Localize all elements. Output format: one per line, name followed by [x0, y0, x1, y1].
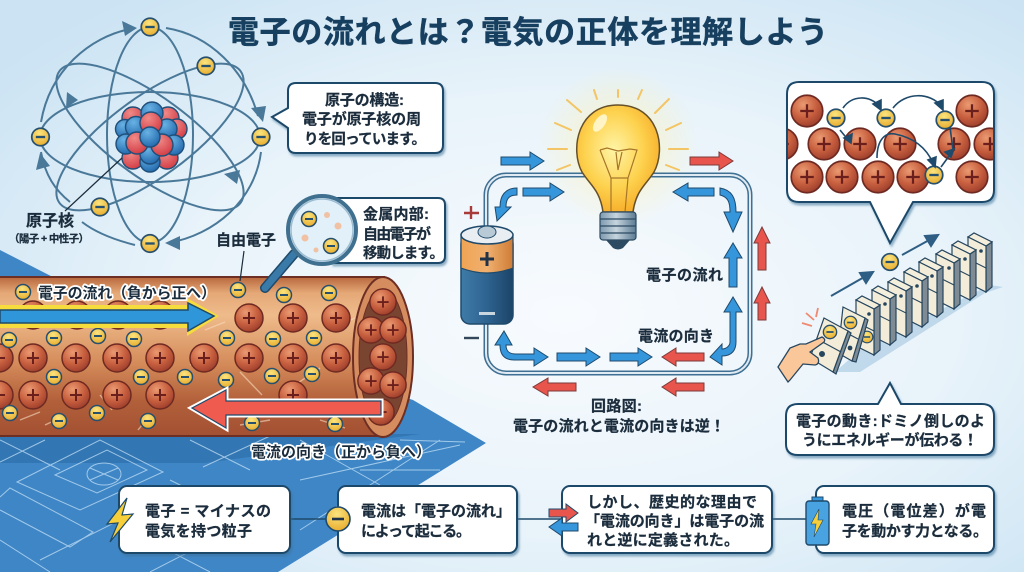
- arrow: current direction: [192, 390, 381, 428]
- domino 1 tilted: [810, 318, 851, 374]
- panel: metal lattice bubble: [766, 82, 1006, 243]
- box: electron definition: 電気を持つ粒子: [145, 522, 252, 540]
- title: 電子の流れとは？電気の正体を理解しよう: [228, 15, 828, 50]
- domino shadows: [835, 285, 1003, 372]
- domino 3 electron: [861, 331, 873, 343]
- wire label: current direction: 電流の向き（正から負へ）: [251, 443, 431, 461]
- blue electron arrows: [495, 152, 742, 366]
- lattice ions: [788, 94, 993, 194]
- nucleus label: （陽子 + 中性子）: [9, 232, 89, 245]
- circuit diagram: 電流の向き: [638, 328, 714, 345]
- icon: lightning: [107, 498, 133, 542]
- icon: battery: [806, 497, 829, 545]
- box: current: [326, 486, 517, 553]
- icon: opposing arrows: [549, 504, 578, 536]
- callout: domino: [786, 383, 994, 455]
- light bulb: [577, 105, 659, 250]
- lattice electrons: [827, 109, 954, 184]
- magnifier callout: 自由電子が: [363, 225, 431, 243]
- blueprint sheet: [0, 250, 486, 572]
- electron above dominoes: [882, 254, 898, 270]
- wire end cross-section: [353, 277, 413, 437]
- box: voltage: 子を動かす力となる。: [842, 523, 988, 540]
- free electron label: 自由電子: [216, 231, 276, 249]
- circuit labels: 電子の流れ: [646, 267, 723, 284]
- domino 2 electron: [844, 316, 857, 329]
- box: history: [549, 486, 772, 553]
- free electron label: [216, 231, 276, 281]
- direction arrows: [831, 235, 938, 296]
- callout: atom structure: りを回っています。: [304, 131, 426, 148]
- circuit diagram: 回路図:: [591, 397, 642, 415]
- light rays: [548, 90, 688, 170]
- orbit arrowheads: [36, 21, 266, 250]
- positive ions: [0, 301, 350, 409]
- magnifier callout: [265, 196, 445, 288]
- red current arrows: [533, 152, 770, 396]
- box: electron definition: [107, 486, 290, 553]
- nucleus label: [9, 211, 89, 245]
- box: history: れと逆に定義された。: [587, 531, 739, 549]
- box: history: 「電流の向き」は電子の流: [585, 513, 764, 530]
- callout: atom structure: 原子の構造:: [325, 91, 404, 109]
- circuit diagram: [461, 67, 770, 435]
- callout: domino: 電子の動き:ドミノ倒しのよ: [796, 412, 985, 430]
- battery polarity marks: [464, 206, 479, 338]
- battery: [461, 226, 513, 324]
- hand: [778, 337, 825, 382]
- callout: domino: うにエネルギーが伝わる！: [802, 431, 978, 449]
- box: voltage: 電圧（電位差）が電: [842, 502, 986, 520]
- magnifier callout: 移動します。: [363, 245, 444, 262]
- metal sheen streaks: [20, 318, 355, 430]
- bulb glow: [538, 67, 698, 227]
- nucleus: [116, 102, 187, 172]
- domino 1 electron: [823, 325, 837, 339]
- circuit diagram: 電子の流れと電流の向きは逆！: [513, 417, 725, 435]
- box: voltage: [806, 486, 994, 553]
- arrow: electron flow: [0, 298, 219, 336]
- free electrons: [2, 282, 342, 432]
- magnifier callout: 金属内部:: [363, 205, 429, 223]
- nucleus leader line: [65, 158, 122, 211]
- wire label: electron flow: 電子の流れ（負から正へ）: [38, 284, 216, 302]
- connector lines: [290, 518, 816, 520]
- callout: atom structure: [272, 83, 443, 153]
- electrons on orbits: [32, 18, 270, 252]
- atom orbits: [36, 27, 264, 245]
- atom diagram: [32, 18, 270, 252]
- magnifying glass: [265, 196, 356, 288]
- nucleus label: 原子核: [26, 211, 74, 230]
- copper wire cylinder: [0, 277, 413, 437]
- icon: electron: [326, 507, 350, 531]
- domino row: [778, 233, 1003, 382]
- callout: atom structure: 電子が原子核の周: [302, 110, 421, 128]
- box: history: しかし、歴史的な理由で: [587, 493, 757, 511]
- electron path arrows: [840, 96, 954, 167]
- box: electron definition: 電子 = マイナスの: [145, 503, 271, 520]
- box: current: によって起こる。: [361, 523, 471, 540]
- circuit wire: [486, 175, 750, 373]
- domino 2 tilted: [838, 307, 868, 362]
- tap sparks: [802, 308, 818, 326]
- box: current: 電流は「電子の流れ」: [361, 503, 511, 520]
